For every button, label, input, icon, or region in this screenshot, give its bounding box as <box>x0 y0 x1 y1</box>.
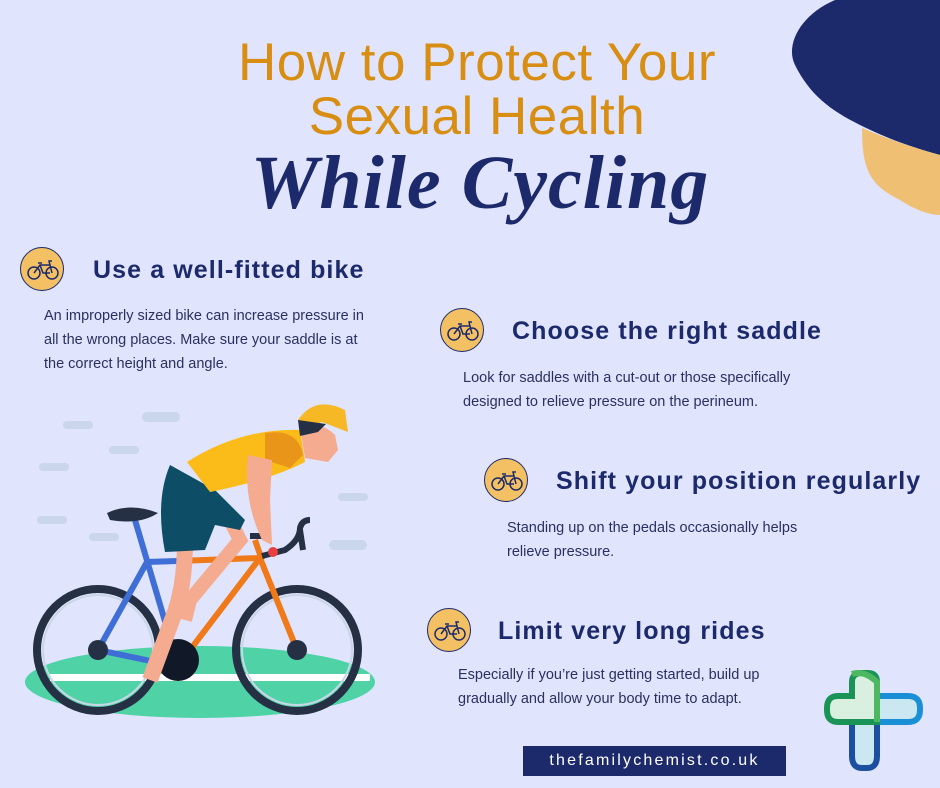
section 4: Especially if you’re just getting started, build up gradually and allow your body time to adapt. <box>458 667 759 707</box>
section 2: Choose the right saddle <box>512 317 822 345</box>
section 2: Look for saddles with a cut-out or those specifically designed to relieve pressure on the perineum. <box>463 370 790 410</box>
footer url <box>523 746 786 776</box>
footer url: thefamilychemist.co.uk <box>549 752 760 769</box>
title: Sexual Health <box>309 87 645 146</box>
section 1: Use a well-fitted bike <box>93 256 364 284</box>
section 1: An improperly sized bike can increase pressure in all the wrong places. Make sure your saddle is at the correct height and angle. <box>44 308 364 372</box>
section 1 <box>20 247 364 372</box>
subtitle: While Cycling <box>251 141 709 225</box>
section 4 <box>427 608 766 707</box>
section 3: Standing up on the pedals occasionally helps relieve pressure. <box>507 520 797 560</box>
logo <box>824 670 923 771</box>
section 3 <box>484 458 921 560</box>
section 4: Limit very long rides <box>498 617 766 645</box>
section 2 <box>440 308 822 410</box>
title <box>238 33 716 146</box>
section 3: Shift your position regularly <box>556 467 921 495</box>
title: How to Protect Your <box>238 33 716 92</box>
illustration: cyclist <box>25 404 375 718</box>
